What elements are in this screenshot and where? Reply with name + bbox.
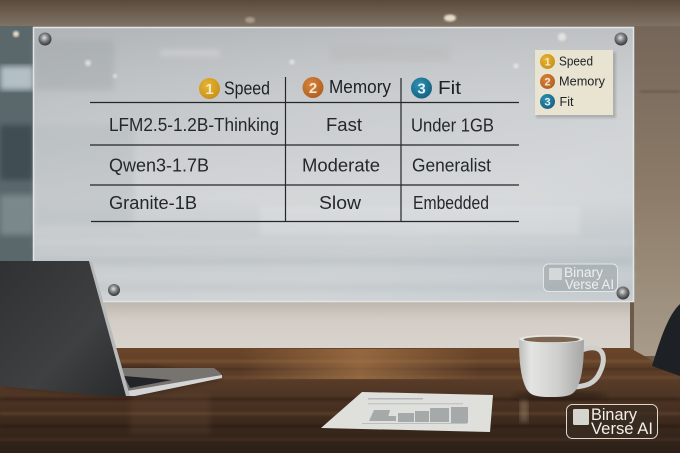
table rows: Moderate — [302, 156, 380, 176]
header: memory: Memory — [329, 76, 392, 97]
page watermark — [566, 404, 658, 438]
page watermark: Verse AI — [591, 420, 653, 438]
table rows: LFM2.5-1.2B-Thinking — [109, 115, 279, 135]
chair — [652, 304, 680, 376]
mounting bolts — [38, 32, 630, 300]
sticky note legend: Fit — [560, 95, 574, 109]
comparison table — [90, 76, 519, 222]
header: speed: 1 — [205, 81, 214, 98]
paper with bar chart — [321, 392, 493, 432]
table rows: Under 1GB — [411, 116, 494, 136]
sticky note legend: 3 — [544, 96, 551, 108]
glass board — [33, 27, 634, 302]
table rows: Embedded — [413, 193, 489, 213]
table rows: Slow — [319, 193, 362, 213]
board watermark: Verse AI — [565, 277, 614, 292]
table rows — [109, 115, 494, 213]
sticky note legend: 1 — [544, 56, 551, 68]
header: speed — [199, 78, 270, 99]
header: fit: 3 — [417, 80, 426, 98]
sticky note legend — [535, 50, 616, 118]
header: fit: Fit — [438, 77, 461, 98]
sticky note legend: 2 — [544, 76, 551, 88]
sticky note legend: Memory — [559, 74, 606, 88]
header: memory — [302, 76, 392, 98]
header: fit — [411, 77, 461, 98]
header: memory: 2 — [309, 80, 317, 97]
table rows: Granite-1B — [109, 193, 197, 213]
page watermark: Binary — [591, 406, 638, 424]
table rows: Generalist — [412, 156, 491, 176]
table rows: Qwen3-1.7B — [109, 156, 209, 176]
sticky note legend: Speed — [559, 54, 593, 68]
wall below board — [0, 298, 630, 350]
laptop — [0, 261, 222, 397]
header: speed: Speed — [224, 78, 270, 98]
board watermark — [544, 264, 618, 292]
board watermark: Binary — [564, 265, 603, 280]
wooden table — [0, 348, 680, 453]
table rows: Fast — [326, 115, 362, 135]
coffee mug — [514, 335, 606, 400]
